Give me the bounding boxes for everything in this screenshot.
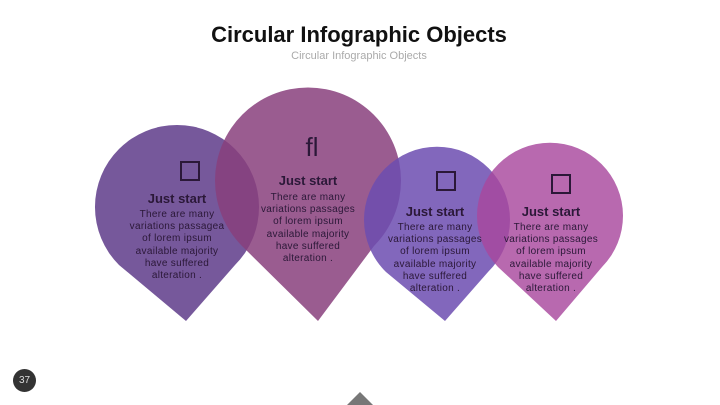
page number <box>13 369 36 392</box>
body 1: have suffered <box>145 258 209 269</box>
shape 4 <box>477 143 623 321</box>
heading 3: Just start <box>406 204 464 219</box>
panel 2 text <box>261 132 355 264</box>
arrow marker <box>347 392 373 405</box>
body 1: available majority <box>136 246 218 257</box>
shape 2 <box>215 87 401 321</box>
body 1: variations passagea <box>130 221 224 232</box>
page number: 37 <box>19 375 30 386</box>
panel 1 text <box>130 161 224 281</box>
body 3: variations passages <box>388 234 482 245</box>
body 3: alteration . <box>410 283 460 294</box>
body 3: have suffered <box>403 271 467 282</box>
body 3 <box>388 222 482 294</box>
icon 3 <box>436 171 456 191</box>
body 4: There are many <box>514 222 588 233</box>
body 4: available majority <box>510 259 592 270</box>
panel 4 text <box>504 174 598 294</box>
body 2: There are many <box>271 192 345 203</box>
shape 3 <box>364 147 510 321</box>
title: Circular Infographic Objects <box>211 22 507 47</box>
body 4 <box>504 222 598 294</box>
body 1: of lorem ipsum <box>142 233 212 244</box>
heading 4: Just start <box>522 204 580 219</box>
body 3: available majority <box>394 259 476 270</box>
body 4: alteration . <box>526 283 576 294</box>
shape 1 <box>95 125 259 321</box>
body 2: of lorem ipsum <box>273 216 343 227</box>
heading 2: Just start <box>279 173 337 188</box>
body 1: There are many <box>140 209 214 220</box>
body 4: have suffered <box>519 271 583 282</box>
body 2: alteration . <box>283 253 333 264</box>
body 2: variations passages <box>261 204 355 215</box>
body 1 <box>130 209 224 281</box>
heading 1: Just start <box>148 191 206 206</box>
body 2: have suffered <box>276 241 340 252</box>
body 2: available majority <box>267 229 349 240</box>
icon 4 <box>551 174 571 194</box>
body 2 <box>261 192 355 264</box>
body 3: of lorem ipsum <box>400 246 470 257</box>
icon 2: ﬂ <box>306 132 318 162</box>
panel 3 text <box>388 171 482 294</box>
body 4: variations passages <box>504 234 598 245</box>
icon 1 <box>180 161 200 181</box>
body 1: alteration . <box>152 270 202 281</box>
subtitle: Circular Infographic Objects <box>291 50 427 62</box>
body 3: There are many <box>398 222 472 233</box>
body 4: of lorem ipsum <box>516 246 586 257</box>
